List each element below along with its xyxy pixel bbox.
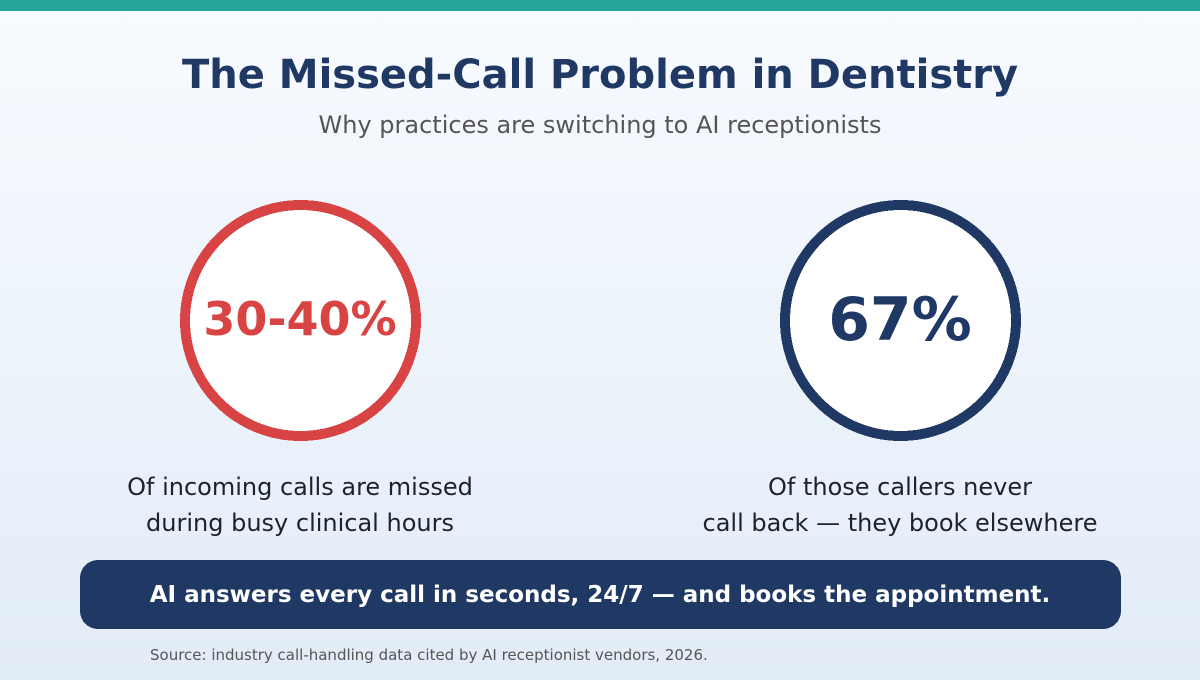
source note: Source: industry call-handling data cited by AI receptionist vendors, 2026.	[150, 646, 708, 664]
callout banner	[80, 560, 1121, 629]
panel: missed calls statistic	[127, 205, 473, 537]
top accent bar	[0, 0, 1200, 11]
title: The Missed-Call Problem in Dentistry	[182, 52, 1018, 98]
subtitle: Why practices are switching to AI receptionists	[319, 111, 881, 139]
stat value: 67%: 67%	[828, 285, 972, 355]
description: callers never call back: call back — they book elsewhere	[703, 509, 1097, 537]
callout banner: AI answers every call in seconds, 24/7 — and books the appointment.	[150, 582, 1050, 608]
red stat ring	[185, 205, 416, 436]
stat value: 30-40%: 30-40%	[203, 292, 397, 346]
description: callers never call back: Of those callers never	[768, 473, 1032, 501]
panel: callers lost statistic	[703, 205, 1097, 537]
description: missed calls: Of incoming calls are missed	[127, 473, 473, 501]
description: missed calls: during busy clinical hours	[146, 509, 454, 537]
navy stat ring	[785, 205, 1016, 436]
